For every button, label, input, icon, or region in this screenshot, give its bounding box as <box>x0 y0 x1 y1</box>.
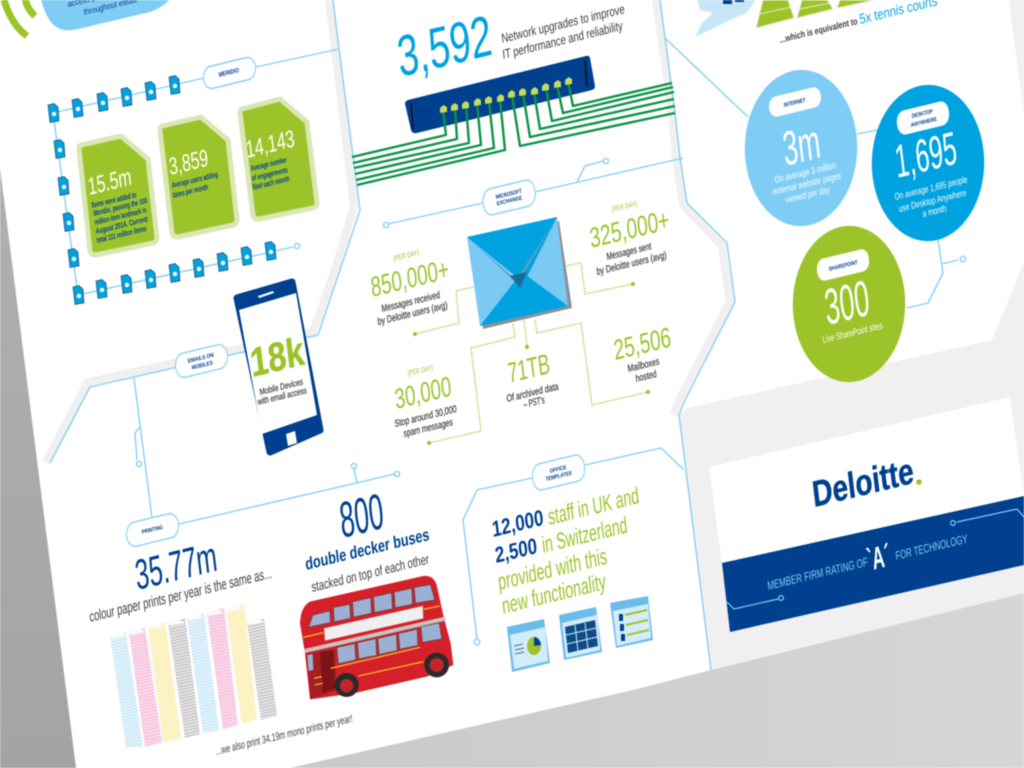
panel: Microsoft Exchange <box>369 178 673 445</box>
card: 15.5m: total 111 million items <box>96 225 147 245</box>
stat: 850,000+ <box>369 249 451 327</box>
rating text: MEMBER FIRM RATING OF <box>767 555 869 593</box>
label: MICROSOFT <box>495 188 523 201</box>
circle: desktop anywhere <box>863 73 993 253</box>
stat: 850,000+: (PER DAY) <box>393 249 419 263</box>
stat: 71TB: Of archived data <box>506 380 559 404</box>
stat: 25,506: 25,506 <box>612 322 673 367</box>
background: left grey wall <box>0 0 140 768</box>
access points bubble <box>40 0 172 30</box>
stat: 325,000+ <box>588 200 671 277</box>
label <box>531 453 586 492</box>
stat: 30,000: (PER DAY) <box>407 364 433 378</box>
grey guide bands <box>46 0 730 462</box>
band circuit lines <box>727 509 1024 609</box>
panel: office templates <box>491 453 653 672</box>
stat: 850,000+: 850,000+ <box>369 254 451 304</box>
network switch <box>352 56 675 185</box>
stat: 325,000+: (PER DAY) <box>611 200 637 214</box>
panel: tennis court comparison <box>695 0 938 45</box>
panel: Meridio <box>48 56 317 305</box>
circle: desktop anywhere: use Desktop Anywhere <box>898 186 967 214</box>
stat: 30,000: Stop around 30,000 <box>394 403 457 429</box>
label <box>125 512 180 548</box>
stat: 71TB: – PST's <box>523 394 546 410</box>
paper stacks <box>110 604 277 747</box>
circle: desktop anywhere: DESKTOP <box>911 108 934 120</box>
stat: 30,000 <box>393 364 457 439</box>
icon: list window <box>610 596 653 648</box>
card: 3,859: Average users adding <box>171 171 218 190</box>
stat: 25,506: Mailboxes <box>627 355 660 374</box>
double decker caption: double decker buses <box>304 525 430 575</box>
icon: red bus <box>300 576 453 699</box>
circle: internet: viewed per day <box>785 183 831 205</box>
card: 14,143: 14,143 <box>245 126 296 164</box>
green cables <box>352 82 675 185</box>
staff statement: 2,500 <box>494 534 539 569</box>
icon: grid window <box>559 607 602 660</box>
circle: desktop anywhere: On average 1,695 people <box>894 173 968 202</box>
stat: 30,000: spam messages <box>403 416 454 439</box>
stat: 850,000+: Messages received <box>381 289 441 314</box>
stat: 71TB <box>506 349 559 410</box>
panel: Deloitte <box>709 397 1024 632</box>
circle: internet: INTERNET <box>783 97 807 109</box>
icon: chart window <box>507 619 550 672</box>
staff statement: staff in UK and <box>547 484 640 531</box>
3,592 figure: 3,592 <box>394 2 495 89</box>
card: 3,859: 3,859 <box>168 145 210 181</box>
circle: internet: external website pages <box>772 169 842 197</box>
white logo panel <box>709 397 1024 563</box>
stat: 25,506 <box>612 322 673 384</box>
circle: sharepoint <box>784 214 914 394</box>
panel: emails on mobiles <box>174 282 320 452</box>
background: lower grey floor <box>76 580 1024 768</box>
circle: internet: 3m <box>780 114 823 176</box>
map marker squares <box>723 0 744 4</box>
card: 15.5m: Items were added to <box>91 191 137 210</box>
equivalence caption <box>779 0 938 45</box>
panel: printing <box>88 483 453 758</box>
Deloitte logo: Deloitte <box>810 450 916 515</box>
network description: IT performance and reliability <box>502 20 624 62</box>
stat: 71TB: 71TB <box>506 349 552 390</box>
staff statement: in Switzerland <box>541 513 629 559</box>
ports <box>440 77 572 113</box>
light grey lower right section <box>679 262 1024 670</box>
colour prints figure: 35.77m <box>132 532 219 599</box>
stat: 850,000+: by Deloitte users (avg) <box>377 299 448 327</box>
stat: 30,000: 30,000 <box>393 372 453 416</box>
rating text: `A´ <box>865 537 892 578</box>
card: 15.5m: August 2014. Current <box>95 216 149 236</box>
label: EXCHANGE <box>496 195 523 208</box>
icon: phone: 18k <box>248 329 307 386</box>
staff statement <box>491 484 640 620</box>
wifi arcs icon <box>4 0 35 36</box>
network description: Network upgrades to improve <box>501 3 626 46</box>
circle: sharepoint: SHAREPOINT <box>828 259 859 273</box>
Meridio label: MERIDIO <box>218 67 240 79</box>
circle: internet: On average 3 million <box>774 159 837 185</box>
panel: network upgrades <box>352 2 675 185</box>
Meridio label <box>202 56 257 90</box>
circle: internet <box>736 58 866 238</box>
navy rating band <box>722 496 1024 632</box>
equivalence caption: ...which is equivalent to <box>779 15 858 45</box>
colour prints caption: colour paper prints per year is the same as... <box>88 564 273 625</box>
stat: 325,000+: Messages sent <box>606 240 652 262</box>
dotted connectors <box>413 263 650 445</box>
file icon frame <box>48 76 300 304</box>
card: 3,859 <box>160 117 237 237</box>
card: 3,859: items per month <box>172 184 209 200</box>
card: 14,143 <box>240 99 317 219</box>
circuit lines <box>50 0 966 670</box>
stacked caption: stacked on top of each other <box>311 551 430 595</box>
circle: sharepoint: 300 <box>822 270 872 336</box>
icon: phone <box>237 282 320 452</box>
card: 15.5m: Meridio, passing the 100 <box>93 197 148 218</box>
icon: phone: with email access <box>256 385 307 407</box>
rating text: FOR TECHNOLOGY <box>895 532 968 563</box>
circle: desktop anywhere: a month <box>922 202 947 219</box>
label <box>482 178 536 217</box>
circle: desktop anywhere: ANYWHERE <box>910 116 938 129</box>
icon: envelope <box>467 217 572 329</box>
rating text <box>767 532 968 593</box>
UK map <box>695 0 755 37</box>
label: MOBILES <box>191 360 214 372</box>
card: 14,143: filed each month <box>252 175 290 192</box>
circle: desktop anywhere: 1,695 <box>892 121 959 188</box>
label: PRINTING <box>141 524 163 536</box>
staff statement: provided with this <box>497 544 608 596</box>
stat: 25,506: hosted <box>635 368 657 384</box>
card: 14,143: Average number <box>250 157 287 173</box>
icon: phone: Mobile Devices <box>259 377 303 397</box>
800 figure: 800 <box>337 483 387 549</box>
stat: 325,000+: 325,000+ <box>588 205 671 255</box>
card: 15.5m <box>79 136 157 255</box>
tennis courts <box>756 0 875 28</box>
label: TEMPLATES <box>545 470 573 483</box>
label: EMAILS ON <box>187 352 214 365</box>
staff statement: new functionality <box>501 569 608 620</box>
label: OFFICE <box>549 464 567 475</box>
right top grey margin <box>1009 0 1024 115</box>
card: 14,143: of engagements <box>251 167 288 183</box>
mono prints note: ...we also print 34.19m mono prints per year! <box>215 713 353 758</box>
card: 15.5m: 15.5m <box>87 164 133 201</box>
circle: sharepoint: Live SharePoint sites <box>822 319 883 345</box>
stat: 325,000+: by Deloitte users (avg) <box>596 249 667 277</box>
staff statement: 12,000 <box>491 505 545 543</box>
card: 15.5m: million item landmark in <box>94 207 147 227</box>
label <box>174 343 229 379</box>
